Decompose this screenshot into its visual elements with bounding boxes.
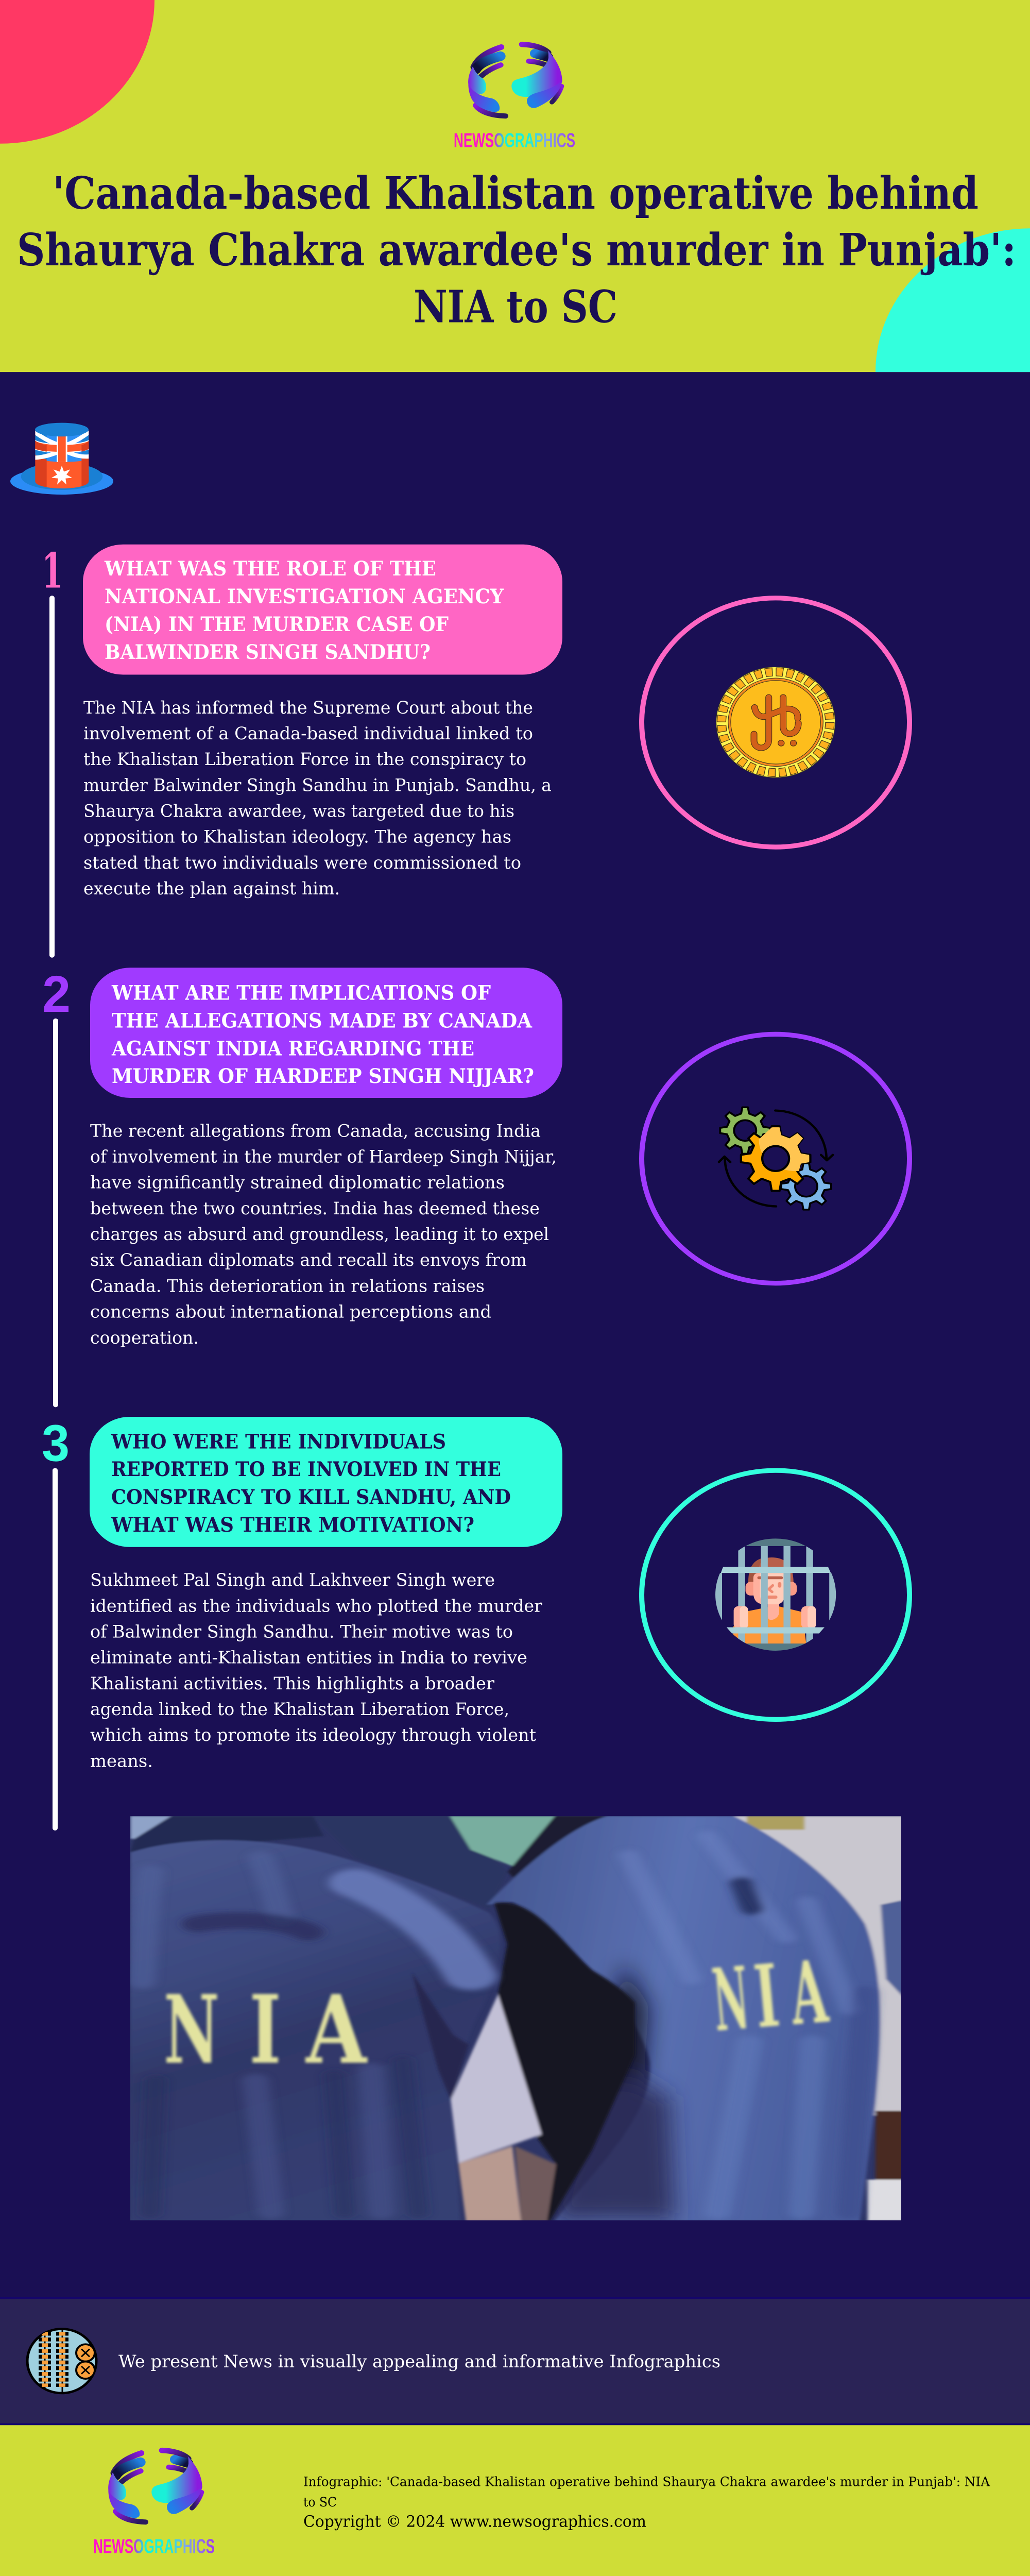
body text 3: eliminate anti-Khalistan entities in India to revive <box>90 1648 527 1668</box>
body text 1: the Khalistan Liberation Force in the conspiracy to <box>83 750 526 769</box>
NIA lettering on left jacket: N <box>164 1975 219 2085</box>
number 2: 2 <box>42 965 71 1023</box>
panel: question 3 <box>42 1414 909 1831</box>
decorative cyan quarter circle <box>876 228 1030 372</box>
body text 1 <box>83 698 552 899</box>
timeline line 1 <box>49 596 55 958</box>
heading pill 2: AGAINST INDIA REGARDING THE <box>111 1037 474 1060</box>
body text 2: have significantly strained diplomatic relations <box>90 1173 505 1193</box>
arms <box>458 2146 521 2222</box>
heading pill 3: WHO WERE THE INDIVIDUALS <box>111 1430 446 1453</box>
heading pill 3: CONSPIRACY TO KILL SANDHU, AND <box>111 1485 511 1509</box>
icon: abacus globe <box>27 2328 96 2394</box>
body text 2 <box>90 1122 557 1348</box>
body text 3: Khalistani activities. This highlights a broader <box>90 1674 495 1693</box>
icon: prisoner behind bars <box>714 1538 837 1651</box>
NIA lettering on right jacket: N <box>709 1947 753 2051</box>
footer credit text <box>303 2475 990 2531</box>
heading pill 1: (NIA) IN THE MURDER CASE OF <box>105 613 449 636</box>
body text 1: The NIA has informed the Supreme Court about the <box>83 698 533 718</box>
body text 1: Shaurya Chakra awardee, was targeted due to his <box>83 802 514 821</box>
timeline line 2 <box>53 1019 58 1407</box>
number 3: 3 <box>42 1414 70 1472</box>
photo: NIA officers in jackets <box>130 1816 907 2222</box>
footer logo: NEWSOGRAPHICS <box>93 2535 215 2557</box>
lower left fold under shoulder <box>412 1973 469 2099</box>
ring 3 <box>642 1470 909 1719</box>
ring 1 <box>642 598 909 847</box>
body text 2: concerns about international perceptions and <box>90 1302 491 1322</box>
heading pill 2: WHAT ARE THE IMPLICATIONS OF <box>111 981 491 1005</box>
body text 2: charges as absurd and groundless, leading it to expel <box>90 1225 549 1244</box>
body text 2: of involvement in the murder of Hardeep Singh Nijjar, <box>90 1147 557 1167</box>
number 1: 1 <box>42 542 63 599</box>
body text 2: The recent allegations from Canada, accusing India <box>90 1122 541 1141</box>
title <box>17 167 1016 333</box>
heading pill 2: MURDER OF HARDEEP SINGH NIJJAR? <box>112 1064 534 1088</box>
footer credit text: Copyright © 2024 www.newsographics.com <box>303 2512 646 2531</box>
heading pill 1: WHAT WAS THE ROLE OF THE <box>104 557 436 580</box>
body text 3: of Balwinder Singh Sandhu. Their motive was to <box>90 1622 513 1642</box>
ring 2 <box>642 1034 909 1283</box>
body text 3: which aims to promote its ideology through violent <box>90 1725 536 1745</box>
heading pill 2: THE ALLEGATIONS MADE BY CANADA <box>112 1009 533 1032</box>
icon: top hat with flag <box>10 423 113 495</box>
body text 2: Canada. This deterioration in relations raises <box>90 1277 485 1296</box>
icon: gears with arrows <box>719 1107 833 1210</box>
body text 2: between the two countries. India has deemed these <box>90 1199 540 1218</box>
panel: header <box>0 0 1030 372</box>
heading pill 1: NATIONAL INVESTIGATION AGENCY <box>105 585 504 608</box>
NIA lettering on left jacket <box>164 1992 370 2065</box>
NIA lettering on right jacket: I <box>750 1945 783 2048</box>
logo: Newsographics <box>454 44 575 151</box>
body text 1: murder Balwinder Singh Sandhu in Punjab. Sandhu, a <box>83 776 552 795</box>
white shirt <box>451 1994 542 2163</box>
panel: question 2 <box>42 965 909 1407</box>
timeline line 3 <box>53 1468 58 1831</box>
body text 2: six Canadian diplomats and recall its envoys from <box>90 1251 527 1270</box>
panel: question 1 <box>42 542 909 958</box>
heading pill 1 <box>83 545 562 674</box>
heading pill 3 <box>90 1417 562 1547</box>
body text 3 <box>90 1570 543 1771</box>
body text 3: agenda linked to the Khalistan Liberation Force, <box>90 1700 509 1719</box>
body text 1: stated that two individuals were commissioned to <box>83 853 521 873</box>
heading pill 3: WHAT WAS THEIR MOTIVATION? <box>111 1513 474 1536</box>
body text 3: Sukhmeet Pal Singh and Lakhveer Singh were <box>90 1570 495 1590</box>
body text 1: opposition to Khalistan ideology. The agency has <box>83 827 511 847</box>
panel: tagline band <box>0 2297 1030 2425</box>
heading pill 1: BALWINDER SINGH SANDHU? <box>105 640 431 664</box>
heading pill 3: REPORTED TO BE INVOLVED IN THE <box>111 1458 501 1481</box>
title: NIA to SC <box>414 281 617 333</box>
body text 2: cooperation. <box>90 1328 199 1348</box>
NIA lettering on left jacket: I <box>249 1975 281 2085</box>
logo: Newsographics: NEWSOGRAPHICS <box>454 129 575 151</box>
panel: footer <box>0 2425 1030 2576</box>
body text 3: means. <box>90 1752 153 1771</box>
decorative red quarter circle <box>0 0 154 144</box>
dark vest <box>494 1903 635 2222</box>
heading pill 2 <box>90 968 562 1098</box>
body text 1: execute the plan against him. <box>83 879 340 899</box>
footer logo <box>93 2450 215 2557</box>
footer credit text: to SC <box>303 2495 337 2510</box>
icon: coin <box>716 667 835 777</box>
NIA lettering on left jacket: A <box>305 1975 368 2085</box>
body text 3: identified as the individuals who plotted the murder <box>90 1597 543 1616</box>
tagline text: We present News in visually appealing and informative Infographics <box>118 2352 720 2371</box>
NIA lettering on right jacket <box>710 1958 832 2032</box>
NIA lettering on right jacket: A <box>785 1941 832 2045</box>
body text 1: involvement of a Canada-based individual linked to <box>83 724 533 743</box>
